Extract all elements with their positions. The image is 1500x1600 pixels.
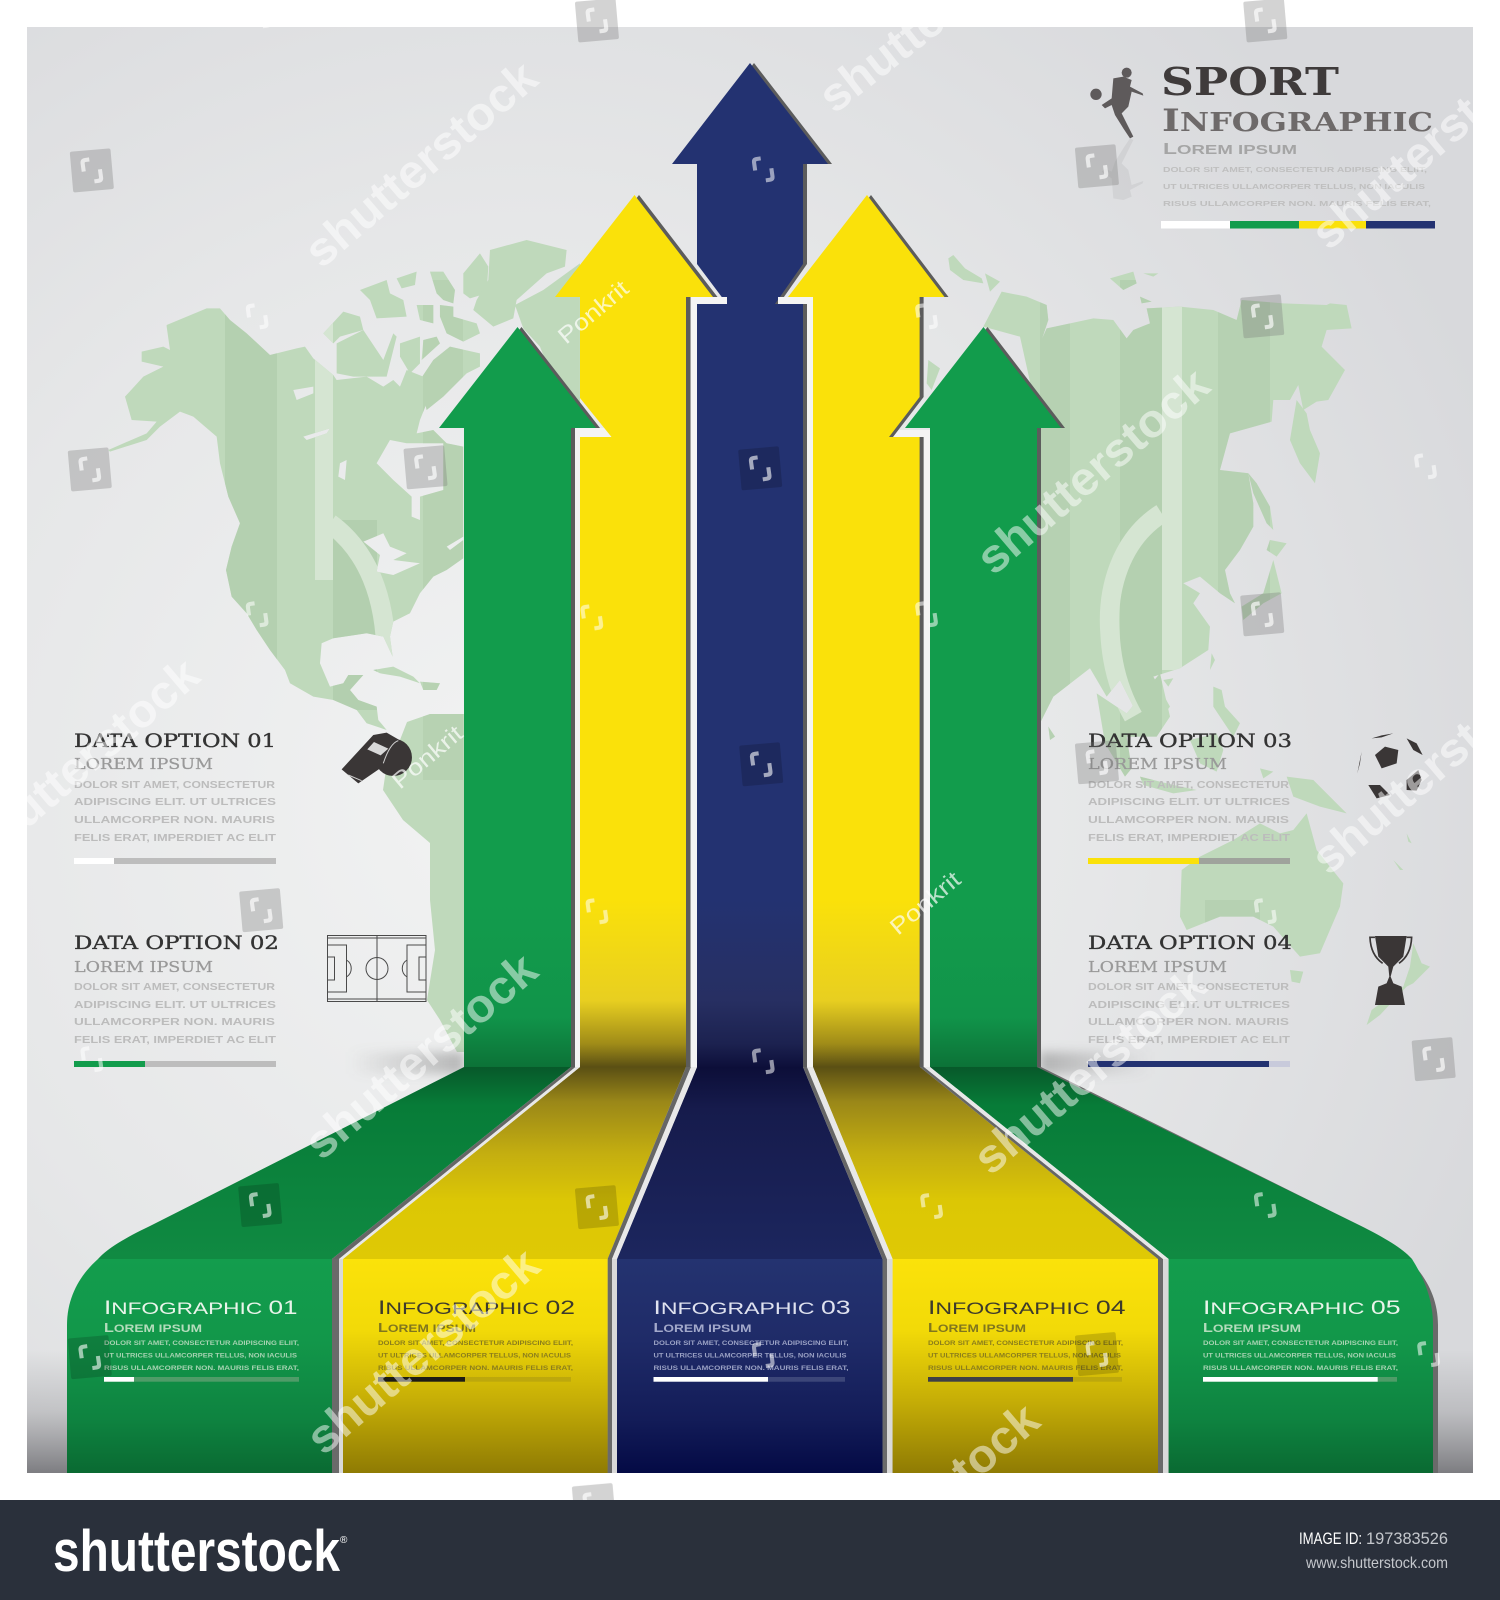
watermarks: shutterstock [294,941,548,1169]
title block [1090,59,1435,228]
floor: perspective strips [98,1067,1438,1473]
panel: infographic 01: LOREM IPSUM [104,1320,202,1335]
data option 04: ULLAMCORPER NON. MAURIS [1088,1016,1289,1028]
colour bar [1161,221,1435,228]
panel: infographic 03: RISUS ULLAMCORPER NON. MAURIS FELIS ERAT, [654,1365,849,1372]
panel: infographic 04: UT ULTRICES ULLAMCORPER TELLUS, NON IACULIS [928,1352,1121,1360]
watermarks: shutterstock [963,956,1217,1184]
data option 03: ULLAMCORPER NON. MAURIS [1088,814,1289,826]
panel: infographic 05: DOLOR SIT AMET, CONSECTETUR ADIPISCING ELIIT, [1203,1340,1398,1347]
watermarks: shutterstock [294,49,548,277]
data option 02 [74,933,279,1067]
panel: infographic 03: LOREM IPSUM [654,1320,752,1335]
data option 01: ULLAMCORPER NON. MAURIS [74,814,275,826]
data option 04 [1088,933,1292,1067]
panel: infographic 03 [617,1259,882,1473]
data option 01: DATA OPTION 01 [74,731,276,752]
heading: sport: SPORT [1161,59,1339,104]
panel: infographic 01: INFOGRAPHIC 01 [104,1298,298,1319]
front panels [67,1259,1433,1473]
data option 01: DOLOR SIT AMET, CONSECTETUR [74,779,275,791]
icon: trophy [1370,936,1412,1005]
data option 02: DATA OPTION 02 [74,933,279,954]
watermarks: Ponkrit [387,719,468,794]
arrow: green left [439,327,600,1067]
data option 02: LOREM IPSUM [74,958,213,976]
footer logo: shutterstock [53,1519,341,1584]
data option 01 [74,731,277,864]
watermarks: shutterstock [296,1236,550,1464]
title body text: RISUS ULLAMCORPER NON. MAURIS FELIS ERAT, [1163,199,1431,208]
panel: infographic 04: LOREM IPSUM [928,1320,1026,1335]
panel: infographic 01: UT ULTRICES ULLAMCORPER TELLUS, NON IACULIS [104,1352,297,1360]
data option 03: FELIS ERAT, IMPERDIET AC ELIT [1088,832,1291,844]
panel: infographic 02: DOLOR SIT AMET, CONSECTETUR ADIPISCING ELIIT, [378,1340,573,1347]
data option 03: DATA OPTION 03 [1088,731,1292,752]
panel: infographic 05: INFOGRAPHIC 05 [1203,1298,1400,1319]
title body text: UT ULTRICES ULLAMCORPER TELLUS, NON IACULIS [1163,182,1425,191]
world map [108,240,1430,1052]
panel: infographic 01: RISUS ULLAMCORPER NON. MAURIS FELIS ERAT, [104,1365,299,1372]
panel: infographic 05: RISUS ULLAMCORPER NON. MAURIS FELIS ERAT, [1203,1365,1398,1372]
data option 04: DOLOR SIT AMET, CONSECTETUR [1088,981,1289,993]
panel: infographic 05: LOREM IPSUM [1203,1320,1301,1335]
panel: infographic 01: DOLOR SIT AMET, CONSECTETUR ADIPISCING ELIIT, [104,1340,299,1347]
data option 02: ADIPISCING ELIT. UT ULTRICES [74,999,276,1011]
data option 04: ADIPISCING ELIT. UT ULTRICES [1088,999,1290,1011]
data option 03: LOREM IPSUM [1088,755,1227,773]
watermarks: Ponkrit [553,274,634,349]
footer bar [0,1500,1500,1600]
data option 01: LOREM IPSUM [74,755,213,773]
panel: infographic 03: INFOGRAPHIC 03 [654,1298,850,1319]
arrow: blue centre [672,63,832,1067]
panel: infographic 02: UT ULTRICES ULLAMCORPER TELLUS, NON IACULIS [378,1352,571,1360]
arrow: green right [905,327,1065,1067]
subheading: L OREM IPSUM [1163,141,1297,158]
data option 01: FELIS ERAT, IMPERDIET AC ELIT [74,832,277,844]
panel: infographic 05 [1169,1259,1433,1473]
icon: whistle [342,733,412,783]
panel: infographic 04 [893,1259,1158,1473]
icon: football pitch [328,936,426,1002]
panel: infographic 04: INFOGRAPHIC 04 [928,1298,1126,1319]
data option 02: ULLAMCORPER NON. MAURIS [74,1016,275,1028]
panel: infographic 02: INFOGRAPHIC 02 [378,1298,575,1319]
footer registered mark: ® [340,1535,348,1546]
icon: player silhouette [1090,68,1143,200]
data option 04: FELIS ERAT, IMPERDIET AC ELIT [1088,1034,1291,1046]
footer image id: IMAGE ID: [1299,1529,1362,1548]
panel: infographic 02 [343,1259,608,1473]
floor shadow [350,1052,1150,1074]
panel: infographic 04: DOLOR SIT AMET, CONSECTETUR ADIPISCING ELIIT, [928,1340,1123,1347]
data option 03: DOLOR SIT AMET, CONSECTETUR [1088,779,1289,791]
panel: infographic 02: RISUS ULLAMCORPER NON. MAURIS FELIS ERAT, [378,1365,573,1372]
data option 02: FELIS ERAT, IMPERDIET AC ELIT [74,1034,277,1046]
watermarks: Ponkrit [885,865,966,940]
panel: infographic 03: UT ULTRICES ULLAMCORPER TELLUS, NON IACULIS [654,1352,847,1360]
arrow: yellow right [788,195,948,1067]
data option 04: DATA OPTION 04 [1088,933,1292,954]
watermarks: shutterstock [966,356,1220,584]
panel: infographic 03: DOLOR SIT AMET, CONSECTETUR ADIPISCING ELIIT, [654,1340,849,1347]
panel: infographic 04: RISUS ULLAMCORPER NON. MAURIS FELIS ERAT, [928,1365,1123,1372]
title body text: DOLOR SIT AMET, CONSECTETUR ADIPISCING ELIIT, [1163,165,1427,174]
panel: infographic 01 [67,1259,332,1473]
panel: infographic 05: UT ULTRICES ULLAMCORPER TELLUS, NON IACULIS [1203,1352,1396,1360]
icon: soccer ball [1357,733,1423,798]
data option 04: LOREM IPSUM [1088,958,1227,976]
arrow: yellow left [555,195,718,1067]
data option 01: ADIPISCING ELIT. UT ULTRICES [74,796,276,808]
panel: infographic 02: LOREM IPSUM [378,1320,476,1335]
data option 03: ADIPISCING ELIT. UT ULTRICES [1088,796,1290,808]
data option 02: DOLOR SIT AMET, CONSECTETUR [74,981,275,993]
heading: infographic: INFOGRAPHIC [1162,103,1433,139]
title body text [1163,165,1431,208]
footer image number: 197383526 [1366,1529,1448,1548]
footer url: www.shutterstock.com [1305,1555,1448,1572]
data option 03 [1088,731,1292,864]
white separators [575,297,930,1067]
